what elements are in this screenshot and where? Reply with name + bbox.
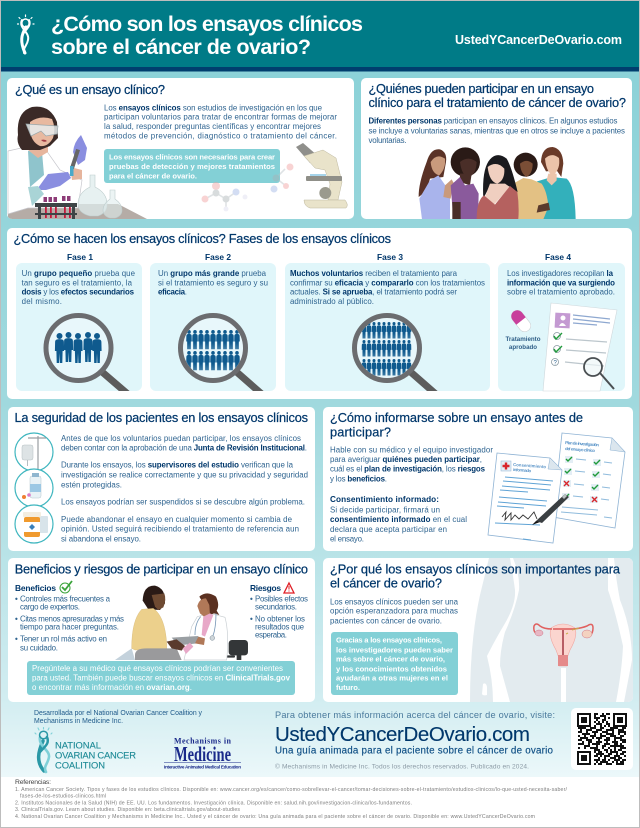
- woman 5: [535, 147, 576, 219]
- heading: how to learn: [330, 410, 583, 440]
- text: informed consent: [330, 495, 467, 543]
- footer: website call to action: Una guía animada para el paciente sobre el cáncer de ovario: [275, 746, 554, 756]
- footer: website call to action: [275, 710, 555, 770]
- footer: website call to action: UstedYCancerDeOvario.com: [275, 723, 530, 746]
- body text: participants: voluntarias.: [368, 136, 406, 145]
- footer: website call to action: Para obtener más información acerca del cáncer de ovario, visite:: [275, 710, 555, 720]
- body text: questions: para averiguar quiénes pueden participar,: [330, 455, 482, 464]
- phase 3: actuales. Si se aprueba, el tratamiento podrá ser: [290, 288, 457, 297]
- benefits list: •: [15, 595, 18, 604]
- risks list: secundarios.: [255, 603, 297, 612]
- heading: who can participate: clínico para el tratamiento de cáncer de ovario?: [368, 95, 626, 110]
- heading: benefits and risks: Beneficios y riesgos de participar en un ensayo clínico: [15, 562, 308, 577]
- logo: National Ovarian Cancer Coalition: [35, 728, 136, 772]
- body text: safety: investigación se realice correctamente y que su privacidad y seguridad: [61, 471, 308, 480]
- phase 4: sobre el tratamiento aprobado.: [507, 288, 615, 297]
- benefits list: Controles más frecuentes a: [20, 595, 111, 604]
- callout: knowledge helps others: futuro.: [336, 683, 360, 692]
- text: informed consent: declara que acepta participar en: [330, 525, 447, 534]
- text: developed by: [34, 710, 203, 725]
- woman 3: [477, 155, 519, 219]
- benefits list: tiempo para hacer preguntas.: [20, 623, 119, 632]
- illustration: microscope: [296, 143, 347, 208]
- illustration: consent document with pen: informado: [513, 467, 532, 473]
- heading: who can participate: [368, 81, 626, 110]
- main title: sobre el cáncer de ovario?: [51, 35, 311, 59]
- heading: phases: ¿Cómo se hacen los ensayos clínicos? Fases de los ensayos clínicos: [14, 231, 391, 246]
- body text: safety: si abandona el ensayo.: [61, 534, 141, 543]
- main title: [51, 12, 363, 59]
- text: informed consent: Consentimiento informado:: [330, 495, 439, 504]
- risks list: No obtener los: [255, 615, 305, 624]
- callout: knowledge helps others: y los conocimientos obtenidos: [336, 664, 447, 673]
- phase 1: Fase 1: [67, 252, 93, 262]
- references: 2. Institutos Nacionales de la Salud (NIH) de EE. UU. Los fundamentos. Investigación clínica. Disponible en: salud.nih.gov/investigacion-clinica/los-fundamentos.: [15, 801, 412, 807]
- icon: check mark: [60, 581, 72, 593]
- body text: safety: estén protegidas.: [61, 480, 122, 489]
- panel: why trials matter: [323, 558, 633, 702]
- body text: participants: se incluye a voluntarias sanas, mientras que en otros se incluye a pacientes: [368, 126, 625, 135]
- phase 3: Fase 3: [377, 252, 403, 262]
- icon: IV stand: [15, 433, 53, 471]
- icon: pill bottle: [15, 505, 53, 543]
- callout: knowledge helps others: los investigadores pueden saber: [336, 645, 453, 654]
- risks list: [250, 583, 308, 640]
- heading: who can participate: ¿Quiénes pueden participar en un ensayo: [368, 81, 594, 96]
- phase 4: Los investigadores recopilan la: [507, 269, 614, 278]
- callout: knowledge helps others: Gracias a los ensayos clínicos,: [336, 636, 442, 645]
- illustration: research plan document: Plan de investigación: [565, 440, 600, 447]
- callout: ask your doctor: [27, 661, 295, 695]
- references: 1. American Cancer Society. Tipos y fases de los estudios clínicos. Disponible en: www.cancer.org/es/cancer/como-sobrellevar-el-cancer/tomar-decisiones-sobre-el-tratamiento/estudios-clinicos/lo-que-usted-necesita-saber/: [15, 787, 568, 793]
- logo: National Ovarian Cancer Coalition: NATIONAL: [55, 740, 101, 750]
- phase 4: [498, 252, 625, 391]
- text: developed by: Mechanisms in Medicine Inc.: [34, 718, 123, 725]
- benefits list: cargo de expertos.: [20, 603, 80, 612]
- references: fases-de-los-estudios-clinicos.html: [20, 794, 106, 800]
- references: 4. National Ovarian Cancer Coalition y Mechanisms in Medicine Inc.. Usted y el cáncer de ovario: Una guía animada para el paciente sobre el cáncer de ovario. Disponible en: www.UstedYCancerDeOvario.com: [15, 814, 535, 820]
- illustration: patient and doctor: [115, 586, 248, 660]
- callout: ask your doctor: o encontrar más información en ovarian.org.: [32, 683, 192, 692]
- heading: why trials matter: ¿Por qué los ensayos clínicos son importantes para: [330, 562, 621, 577]
- magnifier: more people: [180, 316, 264, 396]
- illustration: uterus and ovaries: [534, 624, 593, 666]
- phase 2: Un grupo más grande prueba: [158, 269, 267, 278]
- benefits list: su cuidado.: [20, 643, 58, 652]
- body text: definition: [104, 103, 337, 140]
- phase 1: Un grupo pequeño prueba que: [22, 269, 136, 278]
- risks list: Riesgos: [250, 583, 281, 593]
- callout: knowledge helps others: más sobre el cáncer de ovario,: [336, 655, 445, 664]
- panel: phases of clinical trials: [7, 228, 632, 399]
- label: approved treatment: aprobado: [509, 344, 537, 351]
- body text: questions: [330, 446, 493, 483]
- phase 3: administrado al público.: [290, 297, 374, 306]
- magnifier: many people: [354, 316, 438, 396]
- illustration: scientist in the lab: [8, 107, 147, 219]
- risks list: resultados que: [255, 623, 305, 632]
- body text: definition: la salud, responder preguntas científicas y encontrar mejores: [104, 122, 321, 131]
- body text: safety: opinión. Usted seguirá recibiendo el tratamiento de referencia aun: [61, 524, 299, 533]
- woman 4: [514, 153, 550, 219]
- icon: approved pill: [509, 308, 533, 334]
- logo: National Ovarian Cancer Coalition: COALITION: [55, 760, 105, 770]
- body text: hopeful option: pacientes con cáncer de ovario.: [330, 617, 442, 626]
- illustration: research plan document: del ensayo clínico: [565, 446, 596, 453]
- header website: UstedYCancerDeOvario.com: [455, 33, 622, 47]
- phase 4: Fase 4: [545, 252, 571, 262]
- references: [0, 777, 640, 827]
- logo: Mechanisms in Medicine: Mechanisms in: [174, 736, 232, 746]
- label: approved treatment: [505, 336, 541, 351]
- illustration: study document with magnifier: ?: [554, 360, 558, 366]
- body text: safety: Puede abandonar el ensayo en cualquier momento si cambia de: [61, 515, 293, 524]
- risks list: Posibles efectos: [255, 595, 308, 604]
- callout: why trials are needed: pruebas de detección y mejores tratamientos: [109, 162, 275, 171]
- benefits list: Tener un rol más activo en: [20, 635, 107, 644]
- benefits list: •: [15, 615, 18, 624]
- logo: Mechanisms in Medicine: Interactive Animated Medical Education: [164, 764, 241, 770]
- woman 1: [419, 149, 455, 219]
- phase 2: Fase 2: [205, 252, 231, 262]
- QR code: [571, 708, 633, 770]
- phase 1: [16, 252, 142, 396]
- heading: how to learn: participar?: [330, 425, 391, 440]
- panel: how to learn about a trial: [323, 407, 633, 551]
- panel: patient safety: [8, 407, 315, 551]
- panel: benefits and risks: [8, 558, 315, 702]
- text: informed consent: el ensayo.: [330, 534, 364, 543]
- body text: safety: Durante los ensayos, los supervisores del estudio verifican que la: [61, 461, 294, 470]
- body text: questions: y los beneficios.: [330, 474, 387, 483]
- callout: ask your doctor: para usted. También puede buscar ensayos clínicos en ClinicalTrials.gov: [32, 674, 291, 683]
- text: informed consent: consentimiento informado en el cual: [330, 515, 467, 524]
- risks list: esperaba.: [255, 631, 287, 640]
- logo: Mechanisms in Medicine: Medicine: [174, 742, 231, 766]
- phase 2: [150, 252, 276, 396]
- label: approved treatment: Tratamiento: [505, 336, 541, 343]
- body text: safety: Los ensayos podrían ser suspendidos si se descubre algún problema.: [61, 498, 305, 507]
- references: 3. ClinicalTrials.gov. Learn about studies. Disponible en: beta.clinicaltrials.gov/about-studies: [15, 807, 240, 813]
- icon: warning triangle: [284, 583, 294, 593]
- heading: what is a trial: ¿Qué es un ensayo clínico?: [15, 82, 165, 97]
- icon: vial and pills: [15, 469, 53, 507]
- phase 4: información que va surgiendo: [507, 278, 615, 287]
- woman 2: [451, 147, 480, 219]
- illustration: molecules: [202, 164, 294, 212]
- body text: safety: Antes de que los voluntarios puedan participar, los ensayos clínicos: [61, 434, 301, 443]
- header logo: ribbon icon: [18, 15, 34, 53]
- body text: definition: métodos de prevención, diagnóstico o tratamiento del cáncer.: [104, 131, 337, 140]
- body text: participants: [368, 117, 625, 145]
- phase 2: eficacia.: [158, 288, 187, 297]
- body text: definition: participan voluntarios para tratar de encontrar formas de mejorar: [104, 113, 337, 122]
- panel: what is a clinical trial: [7, 78, 354, 219]
- phase 1: dosis y los efectos secundarios: [22, 288, 135, 297]
- callout: why trials are needed: para el cáncer de ovario.: [109, 171, 197, 180]
- callout: why trials are needed: Los ensayos clínicos son necesarios para crear: [109, 153, 275, 162]
- body text: safety: [61, 434, 308, 543]
- body text: questions: cuál es el plan de investigación, los riesgos: [330, 465, 486, 474]
- illustration: body silhouette: [470, 558, 633, 702]
- phase 2: si el tratamiento es seguro y su: [158, 278, 268, 287]
- callout: knowledge helps others: ayudarán a otras mujeres en el: [336, 674, 448, 683]
- risks list: •: [250, 595, 253, 604]
- footer: website call to action: © Mechanisms in Medicine Inc. Todos los derechos reservados. Publicado en 2024.: [275, 762, 529, 770]
- phase 1: tan seguro es el tratamiento, la: [22, 278, 133, 287]
- illustration: research plan document: [553, 433, 625, 528]
- body text: participants: Diferentes personas participan en ensayos clínicos. En algunos estudios: [368, 117, 618, 126]
- header band: [0, 0, 640, 72]
- callout: knowledge helps others: [331, 632, 458, 695]
- benefits list: •: [15, 635, 18, 644]
- body text: hopeful option: [330, 597, 459, 626]
- callout: why trials are needed: [104, 149, 280, 183]
- phase 3: Muchos voluntarios reciben el tratamiento para: [290, 269, 458, 278]
- heading: why trials matter: [330, 562, 621, 591]
- panel: who can participate: [361, 78, 632, 219]
- logo: Mechanisms in Medicine: [164, 736, 241, 770]
- text: informed consent: Si decide participar, firmará un: [330, 506, 440, 515]
- body text: definition: Los ensayos clínicos son estudios de investigación en los que: [104, 103, 323, 112]
- illustration: five women: [419, 147, 576, 219]
- phase 3: confirmar su eficacia y compararlo con los tratamientos: [290, 278, 485, 287]
- heading: why trials matter: el cáncer de ovario?: [330, 576, 442, 591]
- footer: developers and logos: [34, 710, 241, 772]
- illustration: consent document with pen: [488, 453, 569, 543]
- callout: ask your doctor: Pregúntele a su médico qué ensayos clínicos podrían ser convenientes: [32, 664, 283, 673]
- benefits list: Beneficios: [15, 583, 56, 593]
- benefits list: Citas menos apresuradas y más: [20, 615, 124, 624]
- references: Referencias:: [15, 779, 51, 786]
- logo: National Ovarian Cancer Coalition: OVARIAN CANCER: [55, 750, 136, 760]
- body text: hopeful option: Los ensayos clínicos pueden ser una: [330, 597, 459, 606]
- main title: ¿Cómo son los ensayos clínicos: [51, 12, 363, 36]
- illustration: consent document with pen: Consentimiento: [513, 462, 547, 469]
- magnifier: few people: [46, 316, 130, 396]
- body text: questions: Hable con su médico y el equipo investigador: [330, 446, 493, 455]
- body text: safety: deben contar con la aprobación de una Junta de Revisión Institucional.: [61, 443, 307, 452]
- risks list: •: [250, 615, 253, 624]
- benefits list: [15, 581, 124, 652]
- text: developed by: Desarrollada por el National Ovarian Cancer Coalition y: [34, 710, 203, 717]
- heading: safety: La seguridad de los pacientes en los ensayos clínicos: [14, 410, 308, 425]
- heading: how to learn: ¿Cómo informarse sobre un ensayo antes de: [330, 410, 583, 425]
- phase 1: del mismo.: [22, 297, 62, 306]
- phase 3: [285, 252, 490, 396]
- body text: hopeful option: opción esperanzadora para muchas: [330, 607, 458, 616]
